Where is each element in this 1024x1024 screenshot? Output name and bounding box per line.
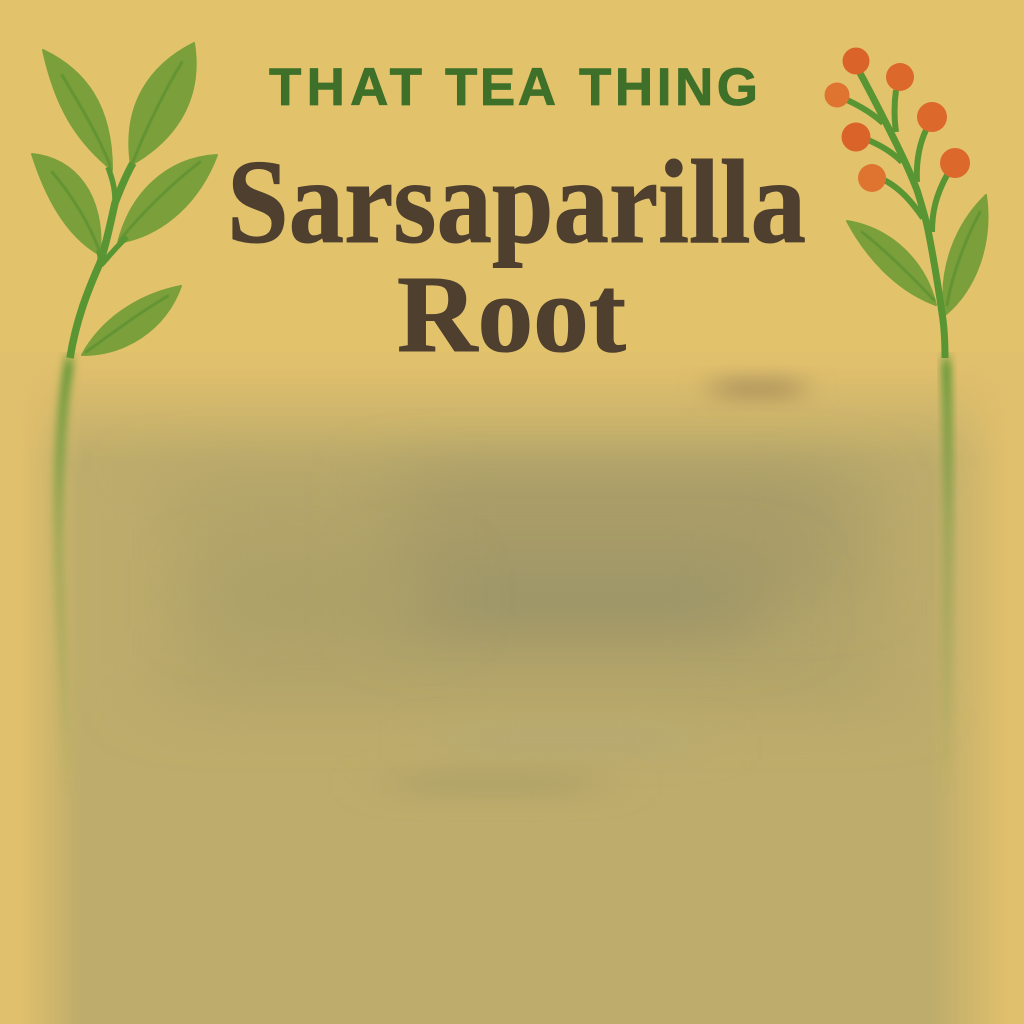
brand heading: THAT xyxy=(269,58,422,117)
title line 1: Sarsaparilla xyxy=(227,135,806,268)
brand heading xyxy=(269,58,758,117)
title line 2: Root xyxy=(397,253,626,375)
blurred stem right xyxy=(946,358,948,790)
blurred stem left xyxy=(58,358,70,790)
brand heading: TEA xyxy=(445,58,556,117)
icon: right berry sprig xyxy=(824,48,988,358)
brand heading: THING xyxy=(579,58,758,117)
blurred lower panel xyxy=(0,352,1024,1024)
icon: left leafy sprig xyxy=(32,43,217,358)
